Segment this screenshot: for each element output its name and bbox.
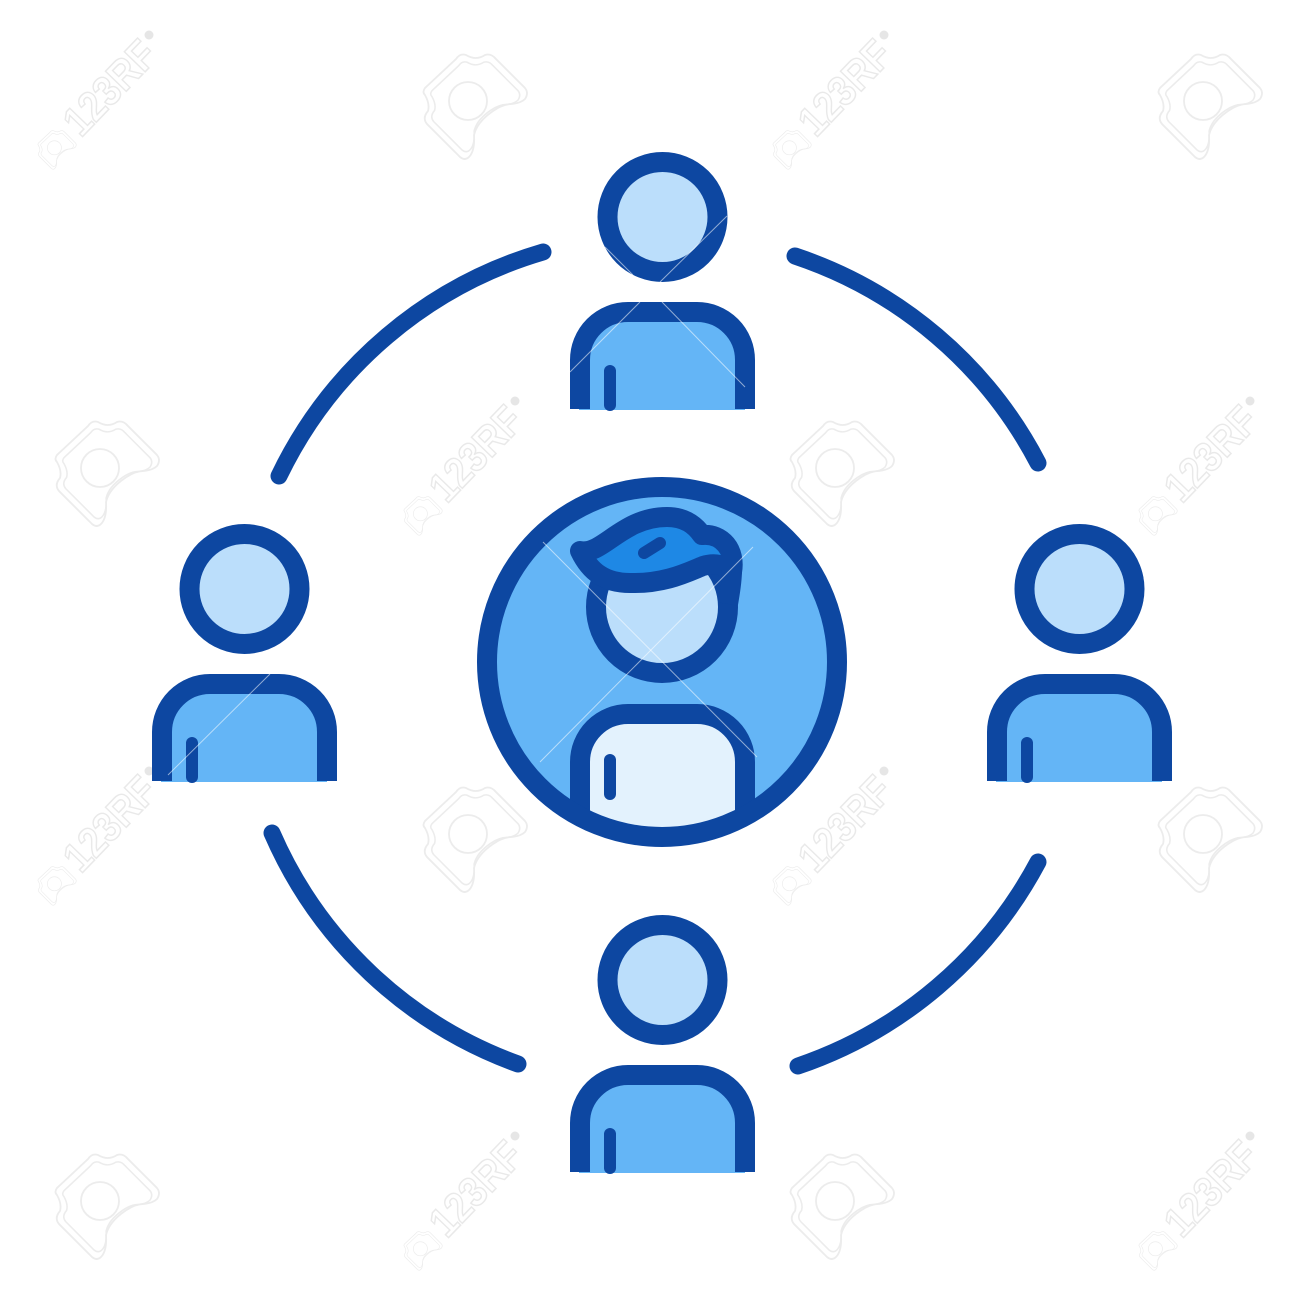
central leader badge [487,487,837,850]
watermark pattern: 123RF [788,767,901,881]
watermark pattern: 123RF [1154,1132,1267,1246]
person: left [161,534,327,782]
leader hair [580,517,733,604]
watermark pattern: 123RF [419,397,532,511]
person: right [996,534,1162,782]
person: bottom [579,925,745,1173]
watermark pattern: 123RF [1154,397,1267,511]
watermark pattern: 123RF [53,767,166,881]
watermark pattern: 123RF [788,31,901,145]
badge outline [487,487,837,837]
leader body [580,714,745,850]
person: top [579,162,745,410]
watermark pattern: 123RF [53,31,166,145]
watermark hairlines over icons [168,216,757,775]
ring: four connecting arcs [272,252,1038,1066]
watermark pattern: 123RF [419,1132,532,1246]
badge background [487,487,837,837]
leader head [596,541,728,673]
